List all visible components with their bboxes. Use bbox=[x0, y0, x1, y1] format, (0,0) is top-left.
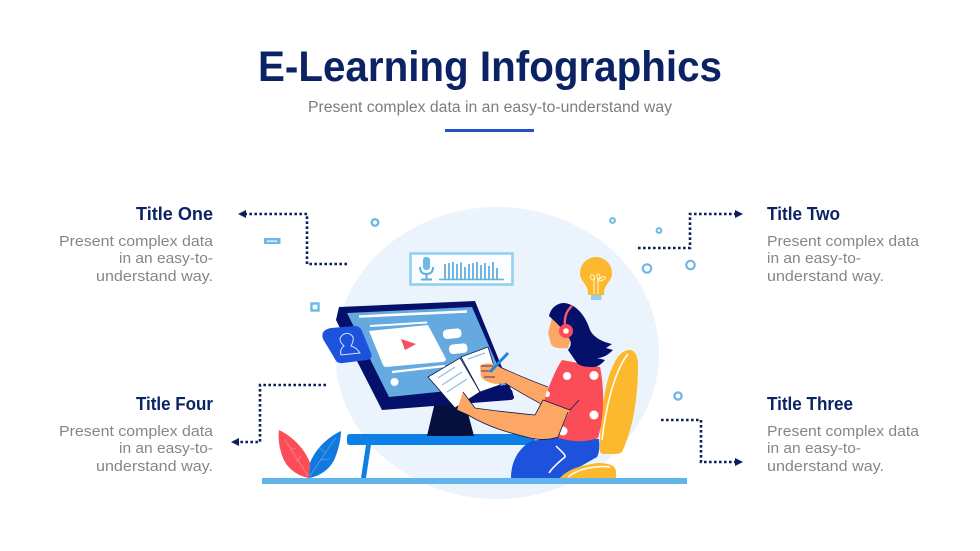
panel: title three: Title Three bbox=[767, 394, 853, 414]
seat highlight bbox=[568, 466, 610, 477]
leaves bbox=[279, 430, 341, 478]
monitor stand bbox=[427, 402, 474, 436]
pen bbox=[490, 353, 508, 372]
panel: title four: Present complex data bbox=[59, 423, 214, 440]
icon: profile badge bbox=[322, 326, 372, 363]
open book bbox=[428, 347, 500, 408]
title: E-Learning Infographics bbox=[258, 43, 722, 91]
panel: title one: Present complex data bbox=[59, 233, 214, 250]
headphones bbox=[565, 306, 572, 327]
title underline bbox=[445, 129, 534, 132]
panel: title three: in an easy-to- bbox=[767, 440, 861, 457]
hair bbox=[549, 303, 613, 367]
panel: title four: in an easy-to- bbox=[119, 440, 213, 457]
panel: title three: Present complex data bbox=[767, 423, 920, 440]
pants bbox=[511, 437, 599, 478]
decorative rings and squares bbox=[264, 218, 695, 400]
floor line bbox=[262, 478, 687, 484]
panel: title three: understand way. bbox=[767, 458, 884, 475]
subtitle: Present complex data in an easy-to-understand way bbox=[308, 99, 672, 116]
panel: title two: Title Two bbox=[767, 204, 840, 224]
panel: title one: understand way. bbox=[96, 268, 213, 285]
panel: title two: in an easy-to- bbox=[767, 250, 861, 267]
panel: title two: understand way. bbox=[767, 268, 884, 285]
arrow: title one bbox=[238, 210, 347, 264]
arrow: title four bbox=[231, 385, 326, 446]
panel: title two: Present complex data bbox=[767, 233, 920, 250]
panel: title three bbox=[767, 394, 920, 475]
face bbox=[548, 318, 574, 348]
panel: title one bbox=[59, 204, 214, 285]
panel: title one: Title One bbox=[136, 204, 213, 224]
panel: title four: Title Four bbox=[136, 394, 213, 414]
lap bbox=[472, 388, 514, 400]
monitor bbox=[336, 301, 514, 410]
panel: title one: in an easy-to- bbox=[119, 250, 213, 267]
panel: title four: understand way. bbox=[96, 458, 213, 475]
arrow: title three bbox=[661, 420, 743, 466]
audio panel with microphone bbox=[410, 254, 512, 284]
person bbox=[472, 303, 616, 478]
background ellipse bbox=[335, 207, 659, 499]
shirt dots bbox=[544, 371, 598, 436]
chair back bbox=[600, 350, 638, 454]
icon: light bulb bbox=[580, 257, 612, 300]
desk bbox=[347, 434, 535, 478]
arms and hands bbox=[457, 363, 579, 439]
panel: title two bbox=[767, 204, 920, 285]
panel: title four bbox=[59, 394, 214, 475]
arrow: title two bbox=[638, 210, 743, 248]
shirt bbox=[543, 360, 603, 441]
chair seat bbox=[560, 463, 616, 478]
